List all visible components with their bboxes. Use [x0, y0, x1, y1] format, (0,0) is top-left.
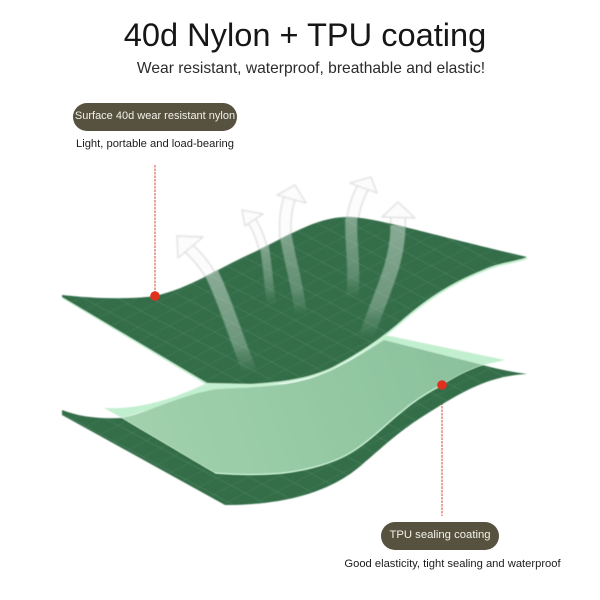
- dashed leader line: surface: [154, 165, 156, 296]
- label pill: surface nylon: Surface 40d wear resistant nylon: [75, 110, 235, 122]
- arrows above the fabric: [177, 177, 415, 320]
- bottom fabric layer: [62, 365, 527, 505]
- top fabric layer: [62, 217, 527, 385]
- label pill: TPU coating: [381, 522, 499, 550]
- illustration: fabric layers: [61, 165, 528, 516]
- label pill: TPU coating: TPU sealing coating: [389, 529, 491, 541]
- arrow stems seen through the fabric: [210, 210, 398, 372]
- TPU coating layer: [104, 335, 505, 474]
- red marker: surface: [150, 291, 160, 301]
- subtitle: Wear resistant, waterproof, breathable and elastic!: [137, 60, 485, 77]
- red marker: coating: [437, 380, 447, 390]
- caption: surface nylon: Light, portable and load-bearing: [76, 138, 234, 150]
- dashed leader line: coating: [441, 385, 443, 516]
- caption: TPU coating: Good elasticity, tight sealing and waterproof: [344, 558, 561, 570]
- label pill: surface nylon: [73, 103, 237, 131]
- title: 40d Nylon + TPU coating: [124, 16, 486, 53]
